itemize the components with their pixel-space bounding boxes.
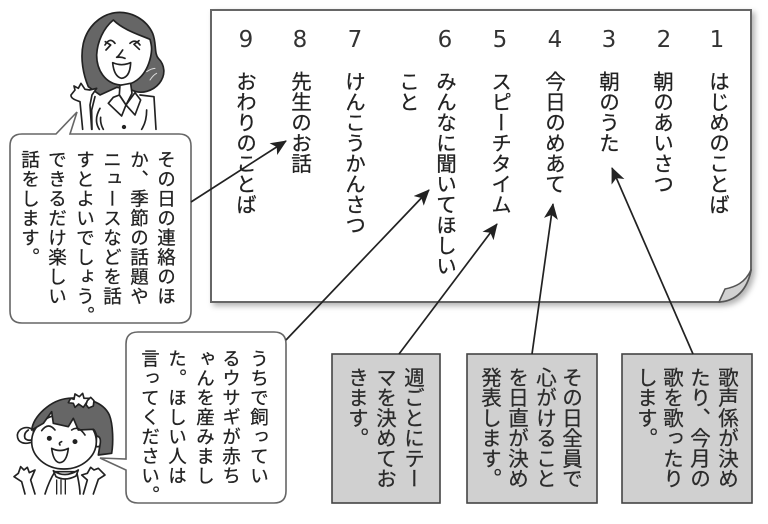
note box: morning song: 歌を歌ったり (660, 367, 684, 488)
item 4 (542, 27, 566, 194)
item 6: こと (396, 71, 418, 112)
arrow: student to item 6 (286, 190, 429, 340)
item 8: 8 (293, 27, 307, 53)
item 6 (396, 27, 456, 276)
callout: student speech bubble: るウサギが赤ち (220, 349, 242, 486)
item 4: 今日のめあて (542, 71, 566, 194)
item 5: スピーチタイム (488, 71, 511, 214)
item 3: 3 (602, 27, 616, 53)
note box: speech time (332, 354, 440, 503)
item 3: 朝のうた (596, 71, 620, 153)
note box: speech time: きます。 (344, 367, 368, 448)
callout: teacher speech bubble: できるだけ楽しい (46, 150, 68, 306)
note box: morning song: たり、今月の (686, 367, 711, 488)
note box: today's goal: を日直が決め (504, 367, 529, 488)
item 5: 5 (493, 27, 507, 53)
note box: speech time: マを決めてお (372, 367, 397, 488)
item 8: 先生のお話 (288, 71, 312, 174)
item 3 (596, 27, 620, 153)
callout: teacher speech bubble: 話をします。 (20, 150, 40, 267)
note box: today's goal (467, 354, 597, 503)
callout: student speech bubble: 言ってください。 (140, 349, 160, 505)
icon: smiling girl (14, 393, 113, 494)
item 7: けんこうかんさつ (342, 71, 365, 235)
item 6: 6 (438, 27, 452, 53)
callout: teacher speech bubble (10, 112, 191, 326)
item 6: みんなに聞いてほしい (432, 71, 456, 276)
item 2 (650, 27, 674, 194)
icon: smiling woman teacher (71, 12, 164, 129)
arrow: note to item 4 (532, 204, 553, 354)
item 8 (288, 27, 312, 174)
item 7: 7 (348, 27, 362, 53)
item 9: おわりのことば (232, 71, 256, 214)
note box: today's goal: その日全員で (558, 367, 583, 488)
note box: today's goal: 発表します。 (478, 367, 502, 488)
callout: student speech bubble: うちで飼ってい (248, 349, 270, 486)
note box: morning song: 歌声係が決め (714, 367, 739, 488)
item 2: 2 (657, 27, 671, 53)
note box: speech time: 週ごとにテー (400, 367, 425, 488)
arrow: note to item 5 (399, 224, 497, 354)
callout: student speech bubble: ゃんを産みまし (194, 349, 216, 486)
item 1: はじめのことば (706, 71, 729, 214)
item 1: 1 (710, 27, 724, 53)
note box: morning song: します。 (634, 367, 656, 448)
panel: program list sheet (211, 10, 751, 302)
note box: today's goal: 心がけること (532, 367, 557, 488)
arrow: note to item 3 (612, 168, 693, 354)
note box: morning song (622, 354, 752, 503)
page curl (719, 270, 751, 302)
callout: teacher speech bubble: ニュースなどを話 (102, 150, 122, 306)
callout: teacher speech bubble: その日の連絡のほ (156, 150, 176, 306)
item 9: 9 (239, 27, 253, 53)
callout: student speech bubble: た。ほしい人は (166, 349, 188, 486)
callout: teacher speech bubble: か、季節の話題や (128, 150, 150, 306)
callout: student speech bubble (100, 332, 286, 505)
item 2: 朝のあいさつ (650, 71, 674, 194)
arrow: teacher to item 8 (191, 141, 286, 202)
item 4: 4 (548, 27, 562, 53)
callout: teacher speech bubble: すとよいでしょう。 (74, 150, 96, 326)
